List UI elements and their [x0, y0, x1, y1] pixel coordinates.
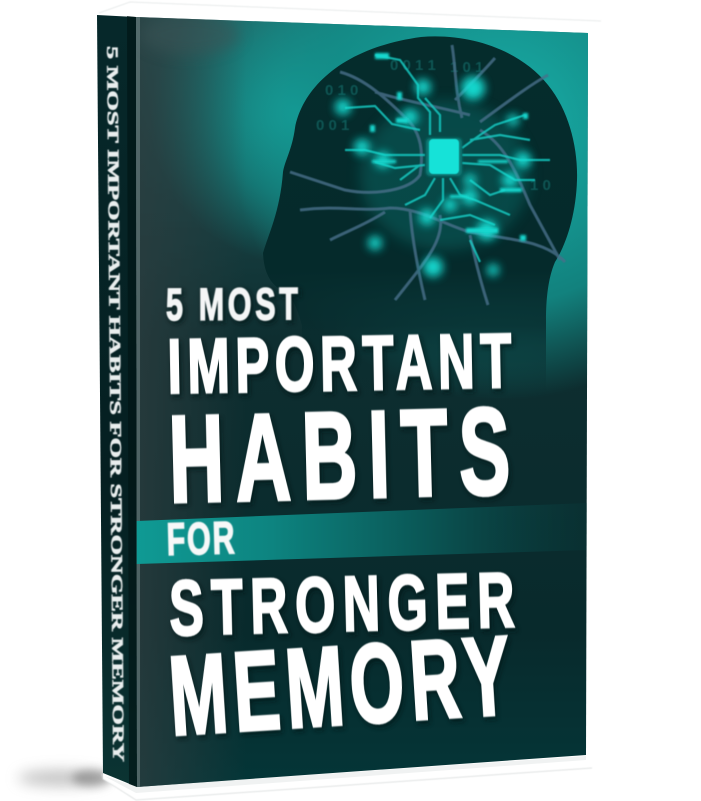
line: stronger: STRONGER: [168, 557, 516, 653]
accent band: [136, 503, 588, 564]
veins: [290, 45, 565, 305]
title shadow: STRONGER: [170, 560, 518, 656]
glowing nodes: [335, 76, 531, 277]
background glow: [130, 10, 600, 797]
title shadow: 5 MOST: [168, 282, 300, 333]
title shadow: [168, 282, 518, 762]
binary digits: 1 0: [530, 177, 551, 194]
head silhouette with circuit brain: [263, 36, 578, 372]
binary digits: 0 0 1: [316, 117, 349, 134]
line: 5 most: 5 MOST: [166, 280, 298, 331]
book spine: [97, 15, 137, 787]
title shadow: HABITS: [169, 385, 514, 531]
binary digits: 1 0 1: [450, 59, 483, 76]
book pages: white block: [99, 1, 601, 800]
circuit traces: [345, 55, 550, 262]
binary digits: 0 1 0: [325, 82, 358, 99]
line: memory: MEMORY: [166, 613, 514, 759]
binary digits: [316, 57, 551, 194]
line: important: IMPORTANT: [167, 317, 512, 410]
brain glow wash: [360, 100, 530, 250]
title shadow: MEMORY: [168, 616, 516, 762]
chip: [426, 138, 462, 176]
cover title: [166, 280, 518, 762]
ground shadow: [18, 770, 112, 786]
binary digits: 0 0 1 1: [390, 57, 436, 74]
line: habits: HABITS: [167, 382, 512, 528]
line: for: FOR: [166, 513, 235, 566]
book front cover: [130, 10, 600, 797]
spine title: 5 MOST IMPORTANT HABITS FOR STRONGER MEMORY: [103, 46, 126, 762]
title shadow: IMPORTANT: [169, 320, 514, 413]
